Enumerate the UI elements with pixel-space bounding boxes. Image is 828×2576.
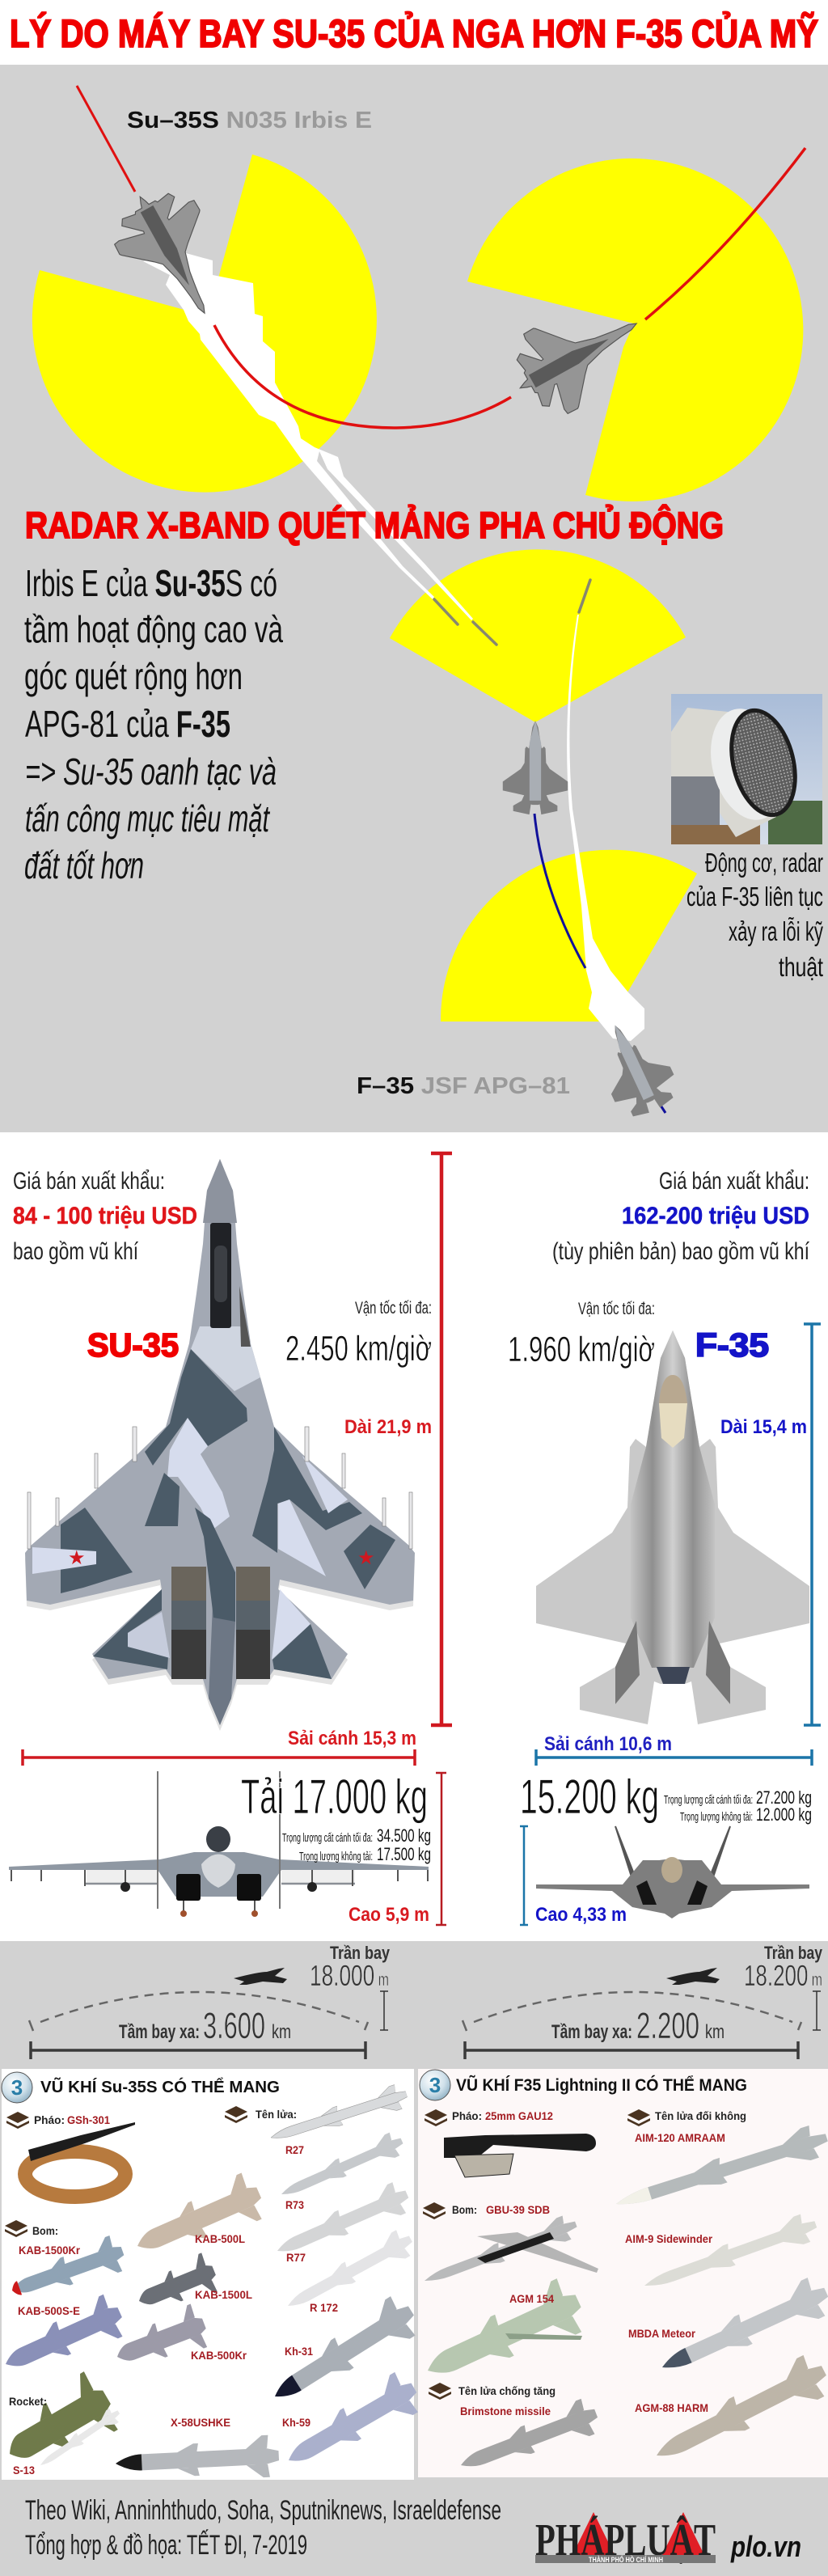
icons: stacked layers	[5, 2106, 247, 2237]
panel: Su-35 specifications	[9, 1153, 452, 1926]
blue flight path	[534, 814, 665, 1113]
logo: Pháp Luật	[535, 2512, 716, 2565]
white missile trails: Su-35	[143, 253, 473, 620]
labels: F-35 weapons: Pháo:	[452, 2109, 482, 2122]
logo: Pháp Luật: PHÁPLUẬT	[535, 2515, 716, 2565]
wingspan: Su-35: Sải cánh 15,3 m	[288, 1728, 416, 1749]
radar sweep sector: F-35 bottom	[441, 850, 697, 1022]
top speed: Su-35	[285, 1299, 432, 1368]
badge: number 3: 3	[429, 2073, 441, 2097]
top speed: F-35: Vận tốc tối đa:	[578, 1300, 655, 1318]
icons: stacked layers	[423, 2109, 650, 2400]
missile: AGM-88 HARM	[646, 2350, 828, 2477]
heading: radar: RADAR X-BAND QUÉT MẢNG PHA CHỦ ĐỘNG	[25, 505, 724, 546]
payload: Su-35: Tải 17.000 kg	[241, 1770, 428, 1824]
labels: F-35 weapons: AGM 154	[509, 2292, 554, 2305]
wingspan: F-35: Sải cánh 10,6 m	[544, 1733, 672, 1755]
missiles: Su-35S air-to-air	[267, 2082, 418, 2319]
price: F-35: 162-200 triệu USD	[622, 1203, 809, 1229]
ceiling and range: Su-35: 18.000 m	[310, 1959, 389, 1992]
panel: ceiling and range	[0, 1941, 828, 2576]
payload: Su-35: 17.500 kg	[377, 1844, 431, 1864]
height: Su-35: Cao 5,9 m	[349, 1904, 429, 1926]
top speed: Su-35: 2.450 km/giờ	[285, 1329, 432, 1368]
missile: AGM 154	[416, 2274, 590, 2397]
badge: number 3	[420, 2070, 450, 2100]
wingspan: F-35	[536, 1733, 812, 1766]
missile trio	[434, 580, 590, 645]
text block: radar comparison: tấn công mục tiêu mặt	[25, 797, 270, 840]
missile: AIM-120 AMRAAM	[611, 2121, 828, 2220]
price: F-35	[552, 1168, 810, 1265]
Su-35 front view	[9, 1771, 429, 1917]
labels: F-35 weapons: MBDA Meteor	[628, 2327, 695, 2340]
cannon: GAU-12	[444, 2134, 596, 2177]
labels: Su-35S weapons	[9, 2108, 338, 2477]
length: F-35: Dài 15,4 m	[720, 1416, 807, 1438]
labels: Su-35S weapons: R73	[285, 2198, 304, 2211]
panel: F-35 weapons	[416, 2069, 828, 2483]
labels: Su-35S weapons: Rocket:	[9, 2395, 47, 2408]
labels: F-35 weapons: AIM-120 AMRAAM	[635, 2131, 725, 2144]
labels: F-35 weapons	[452, 2109, 746, 2417]
labels: Su-35S weapons: KAB-1500L	[195, 2288, 252, 2301]
red flight path 3	[214, 325, 511, 428]
labels: F-35 weapons: AGM-88 HARM	[635, 2401, 708, 2414]
missiles: Su-35S air-to-ground	[115, 2291, 425, 2485]
length: F-35	[720, 1324, 821, 1725]
logo: plo.vn: plo.vn	[730, 2530, 801, 2563]
rockets: S-13	[0, 2368, 124, 2483]
panel: F-35 specifications	[508, 1168, 821, 1926]
ceiling and range: F-35: Tầm bay xa:	[551, 2021, 632, 2043]
ceiling and range: Su-35: Tầm bay xa:	[119, 2021, 200, 2043]
text block: radar comparison	[24, 562, 283, 886]
payload: F-35: 15.200 kg	[520, 1770, 659, 1824]
ceiling and range: Su-35: 3.600	[203, 2005, 265, 2046]
labels: Su-35S weapons: Kh-31	[285, 2345, 313, 2358]
price: Su-35: bao gồm vũ khí	[13, 1238, 139, 1265]
Su-35 top view: ★	[68, 1547, 86, 1569]
labels: Su-35S weapons: S-13	[13, 2464, 35, 2477]
text block: radar comparison: góc quét rộng hơn	[24, 655, 243, 697]
payload: Su-35: Trọng lượng cất cánh tối đa:	[282, 1831, 373, 1845]
text block: radar comparison: APG-81 của F-35	[25, 703, 230, 745]
plane: Su-35 right	[498, 283, 659, 428]
labels: F-35 weapons: Bom:	[452, 2203, 477, 2216]
top speed: Su-35: Vận tốc tối đa:	[355, 1299, 432, 1318]
missile: MBDA Meteor	[653, 2274, 828, 2387]
price: Su-35: 84 - 100 triệu USD	[13, 1203, 197, 1229]
top speed: F-35: 1.960 km/giờ	[508, 1330, 655, 1369]
ceiling and range: F-35: 2.200	[636, 2005, 699, 2046]
labels: Su-35S weapons: Bom:	[32, 2224, 58, 2237]
footer: sources and credit: Theo Wiki, Anninhthudo, Soha, Sputniknews, Israeldefense	[25, 2495, 501, 2526]
labels: F-35 weapons: AIM-9 Sidewinder	[625, 2232, 713, 2245]
ceiling and range: Su-35: Trần bay	[330, 1943, 391, 1963]
labels: Su-35S weapons: Tên lửa:	[256, 2108, 297, 2121]
F-35 front view	[536, 1826, 809, 1918]
plane: F-35 bottom	[585, 1012, 684, 1124]
ceiling and range: Su-35	[29, 1943, 391, 2059]
labels: F-35 weapons: 25mm GAU12	[485, 2109, 553, 2122]
price: Su-35	[13, 1168, 197, 1265]
labels: F-35 weapons: Tên lửa đối không	[655, 2109, 746, 2122]
badge: number 3	[2, 2072, 32, 2103]
photo: radar unit	[671, 694, 822, 844]
ceiling and range: F-35	[463, 1943, 823, 2059]
labels: F-35 weapons: Brimstone missile	[460, 2405, 551, 2417]
height: F-35	[520, 1826, 627, 1926]
logo: Pháp Luật: THÀNH PHỐ HỒ CHÍ MINH	[589, 2555, 663, 2564]
badge: number 3: 3	[11, 2075, 23, 2100]
labels: Su-35S weapons: KAB-500Kr	[191, 2349, 247, 2362]
plane: F-35 top	[503, 721, 568, 814]
radar sweep sector: Su-35 left	[32, 154, 377, 493]
white missile trail: F-35	[567, 615, 644, 1041]
top speed: F-35	[508, 1300, 655, 1369]
footer: sources and credit	[25, 2495, 501, 2561]
labels: Su-35S weapons: KAB-500S-E	[18, 2304, 80, 2317]
label: F-35 radar: F–35 JSF APG–81	[357, 1073, 570, 1099]
labels: F-35 weapons: GBU-39 SDB	[486, 2203, 550, 2216]
text block: radar comparison: Irbis E của Su-35S có	[25, 562, 277, 604]
labels: Su-35S weapons: R27	[285, 2143, 304, 2156]
payload: Su-35: 34.500 kg	[377, 1825, 431, 1846]
length: Su-35	[344, 1153, 452, 1725]
labels: Su-35S weapons: KAB-1500Kr	[19, 2244, 81, 2257]
caption: F-35 faults	[686, 848, 823, 982]
heading: Su-35S weapons: VŨ KHÍ Su-35S CÓ THỂ MANG	[40, 2077, 280, 2096]
missile: Brimstone	[454, 2396, 602, 2483]
red flight path 2	[645, 148, 805, 319]
red flight path 1	[77, 86, 135, 192]
payload: F-35: Trọng lượng cất cánh tối đa:	[664, 1793, 753, 1807]
name: SU-35: SU-35	[87, 1326, 179, 1364]
plane: Su-35 left	[100, 175, 245, 336]
heading: F-35 weapons: VŨ KHÍ F35 Lightning II CÓ THỂ MANG	[456, 2075, 747, 2095]
payload: Su-35	[241, 1770, 431, 1864]
missile: AIM-9 Sidewinder	[640, 2210, 821, 2299]
text block: radar comparison: tầm hoạt động cao và	[24, 608, 283, 650]
height: F-35: Cao 4,33 m	[535, 1904, 627, 1926]
ceiling and range: F-35: km	[705, 2021, 724, 2043]
panel: radar comparison	[0, 65, 828, 1132]
radar sweep sector: Su-35 right	[467, 159, 803, 501]
labels: Su-35S weapons: GSh-301	[67, 2113, 110, 2126]
Su-35 top view	[25, 1159, 415, 1731]
ceiling and range: Su-35: km	[272, 2021, 291, 2043]
Su-35 top view: ★	[357, 1547, 375, 1569]
bomb: GBU-39 SDB	[420, 2212, 598, 2293]
labels: Su-35S weapons: KAB-500L	[195, 2232, 245, 2245]
bombs: Su-35S	[0, 2170, 269, 2385]
payload: Su-35: Trọng lượng không tải:	[299, 1850, 373, 1863]
labels: Su-35S weapons: R 172	[310, 2301, 338, 2314]
labels: Su-35S weapons: Pháo:	[34, 2113, 65, 2126]
label: Su-35S radar: Su–35S N035 Irbis E	[127, 108, 372, 133]
radar sweep sector: F-35 top	[390, 549, 686, 722]
price: Su-35: Giá bán xuất khẩu:	[13, 1168, 165, 1195]
F-35 top view	[536, 1330, 809, 1724]
panel: Su-35S weapons	[0, 2069, 425, 2485]
footer: sources and credit: Tổng hợp & đồ họa: TẾT ĐI, 7-2019	[25, 2530, 307, 2561]
payload: F-35: Trọng lượng không tải:	[680, 1810, 753, 1824]
height: Su-35	[349, 1773, 446, 1926]
name: F-35: F-35	[695, 1326, 769, 1364]
text block: radar comparison: => Su-35 oanh tạc và	[25, 751, 277, 793]
labels: Su-35S weapons: X-58USHKE	[171, 2416, 230, 2429]
wingspan: Su-35	[23, 1728, 416, 1766]
labels: Su-35S weapons: Kh-59	[282, 2416, 310, 2429]
text block: radar comparison: đất tốt hơn	[24, 844, 144, 886]
labels: F-35 weapons: Tên lửa chống tăng	[458, 2384, 556, 2397]
length: Su-35: Dài 21,9 m	[344, 1416, 432, 1438]
labels: Su-35S weapons: R77	[286, 2251, 306, 2264]
cannon: GSh-301	[25, 2122, 135, 2197]
